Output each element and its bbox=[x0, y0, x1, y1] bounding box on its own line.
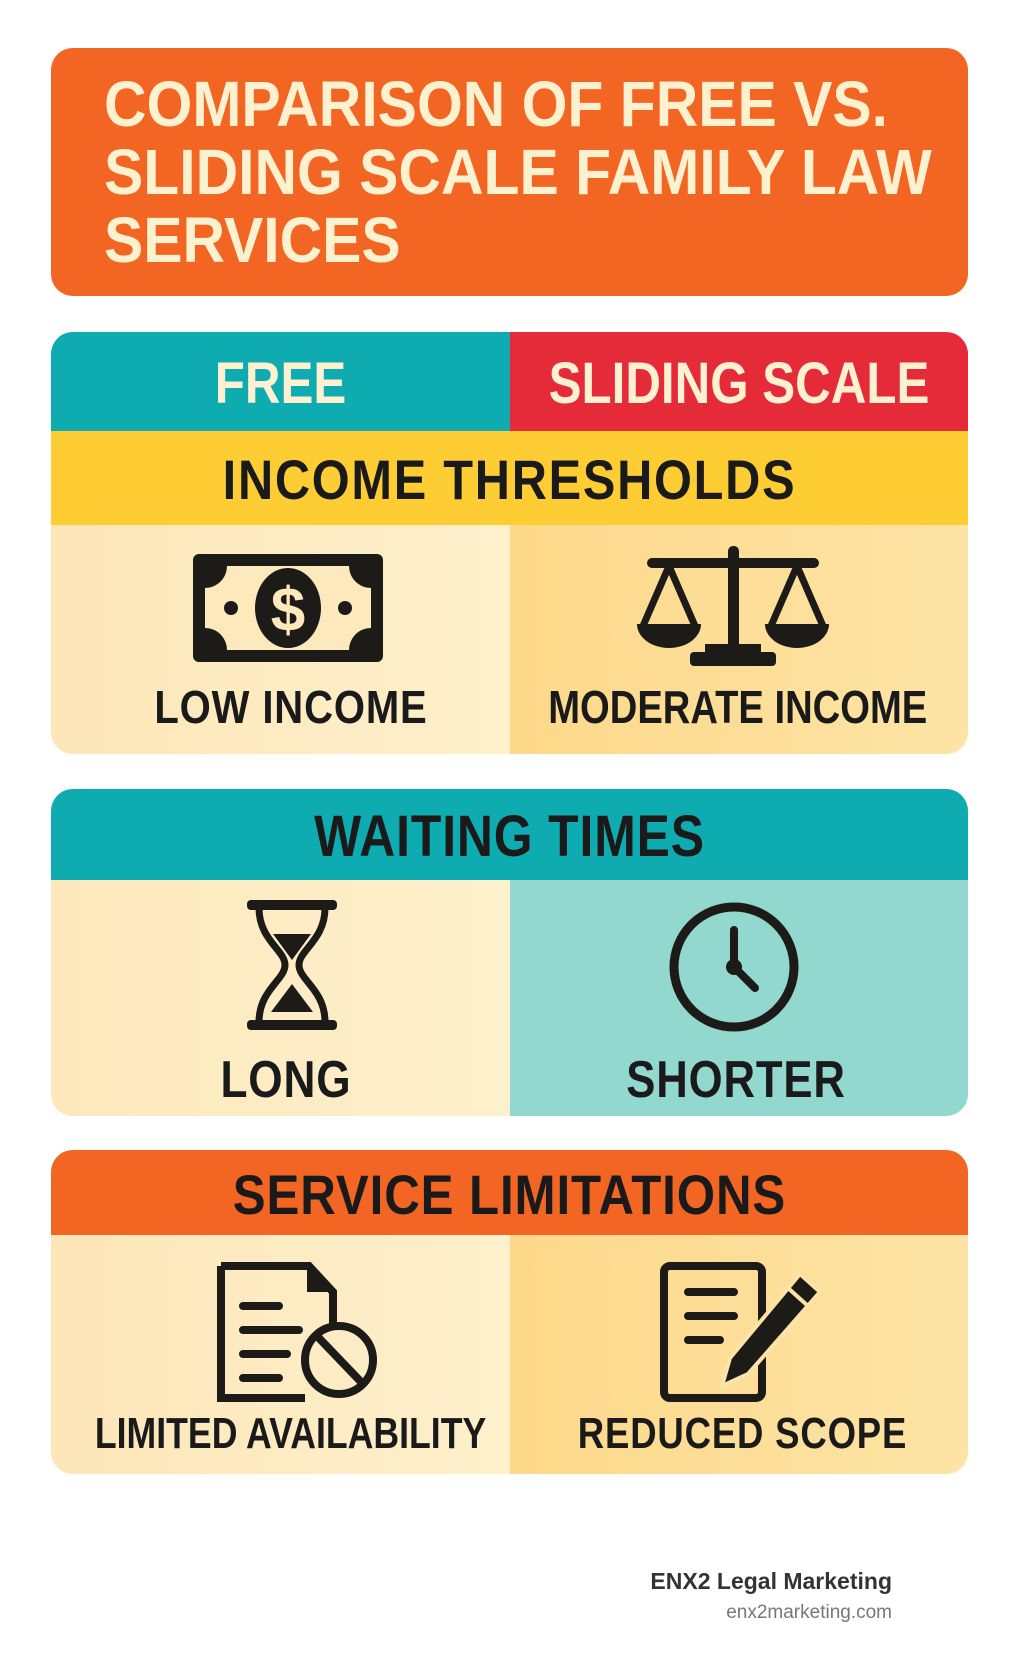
title text bbox=[104, 68, 932, 276]
panel: service limitations bbox=[51, 1150, 968, 1474]
footer credit: enx2marketing.com bbox=[726, 1602, 892, 1623]
title banner bbox=[51, 48, 968, 296]
heading: service limitations: SERVICE LIMITATIONS bbox=[233, 1163, 786, 1226]
label: moderate income: MODERATE INCOME bbox=[548, 681, 927, 733]
label: shorter: SHORTER bbox=[626, 1051, 846, 1109]
heading: income thresholds: INCOME THRESHOLDS bbox=[223, 448, 796, 511]
icon: clock bbox=[670, 902, 798, 1032]
heading: waiting times: WAITING TIMES bbox=[314, 804, 705, 869]
icon: dollar bill bbox=[193, 554, 383, 662]
label: low income: LOW INCOME bbox=[154, 681, 428, 733]
panel: waiting times bbox=[51, 789, 968, 1116]
icon: document with prohibition bbox=[217, 1262, 377, 1402]
label: limited availability: LIMITED AVAILABILITY bbox=[95, 1409, 486, 1458]
cell: moderate income bbox=[510, 525, 968, 754]
panel: income thresholds bbox=[51, 332, 968, 754]
icon: scales bbox=[637, 546, 829, 666]
title text: SLIDING SCALE FAMILY LAW bbox=[104, 136, 932, 208]
label: reduced scope: REDUCED SCOPE bbox=[578, 1409, 907, 1458]
header: free bbox=[51, 332, 510, 431]
icon: dollar bill: $ bbox=[271, 576, 305, 645]
heading: income thresholds bbox=[51, 431, 968, 525]
cell: limited availability bbox=[51, 1235, 510, 1474]
label: long: LONG bbox=[220, 1051, 352, 1109]
header: free: FREE bbox=[215, 351, 346, 416]
icon: document with pencil bbox=[660, 1262, 822, 1402]
heading: service limitations bbox=[51, 1150, 968, 1235]
cell: reduced scope bbox=[510, 1235, 968, 1474]
footer credit: ENX2 Legal Marketing bbox=[650, 1568, 892, 1594]
title text: COMPARISON OF FREE VS. bbox=[104, 68, 888, 140]
heading: waiting times bbox=[51, 789, 968, 880]
cell: long bbox=[51, 880, 510, 1116]
cell: low income bbox=[51, 525, 510, 754]
title text: SERVICES bbox=[104, 204, 401, 276]
header: sliding scale: SLIDING SCALE bbox=[549, 351, 929, 416]
footer credit bbox=[650, 1568, 892, 1623]
icon: hourglass bbox=[247, 900, 337, 1030]
header: sliding scale bbox=[510, 332, 968, 431]
cell: shorter bbox=[510, 880, 968, 1116]
